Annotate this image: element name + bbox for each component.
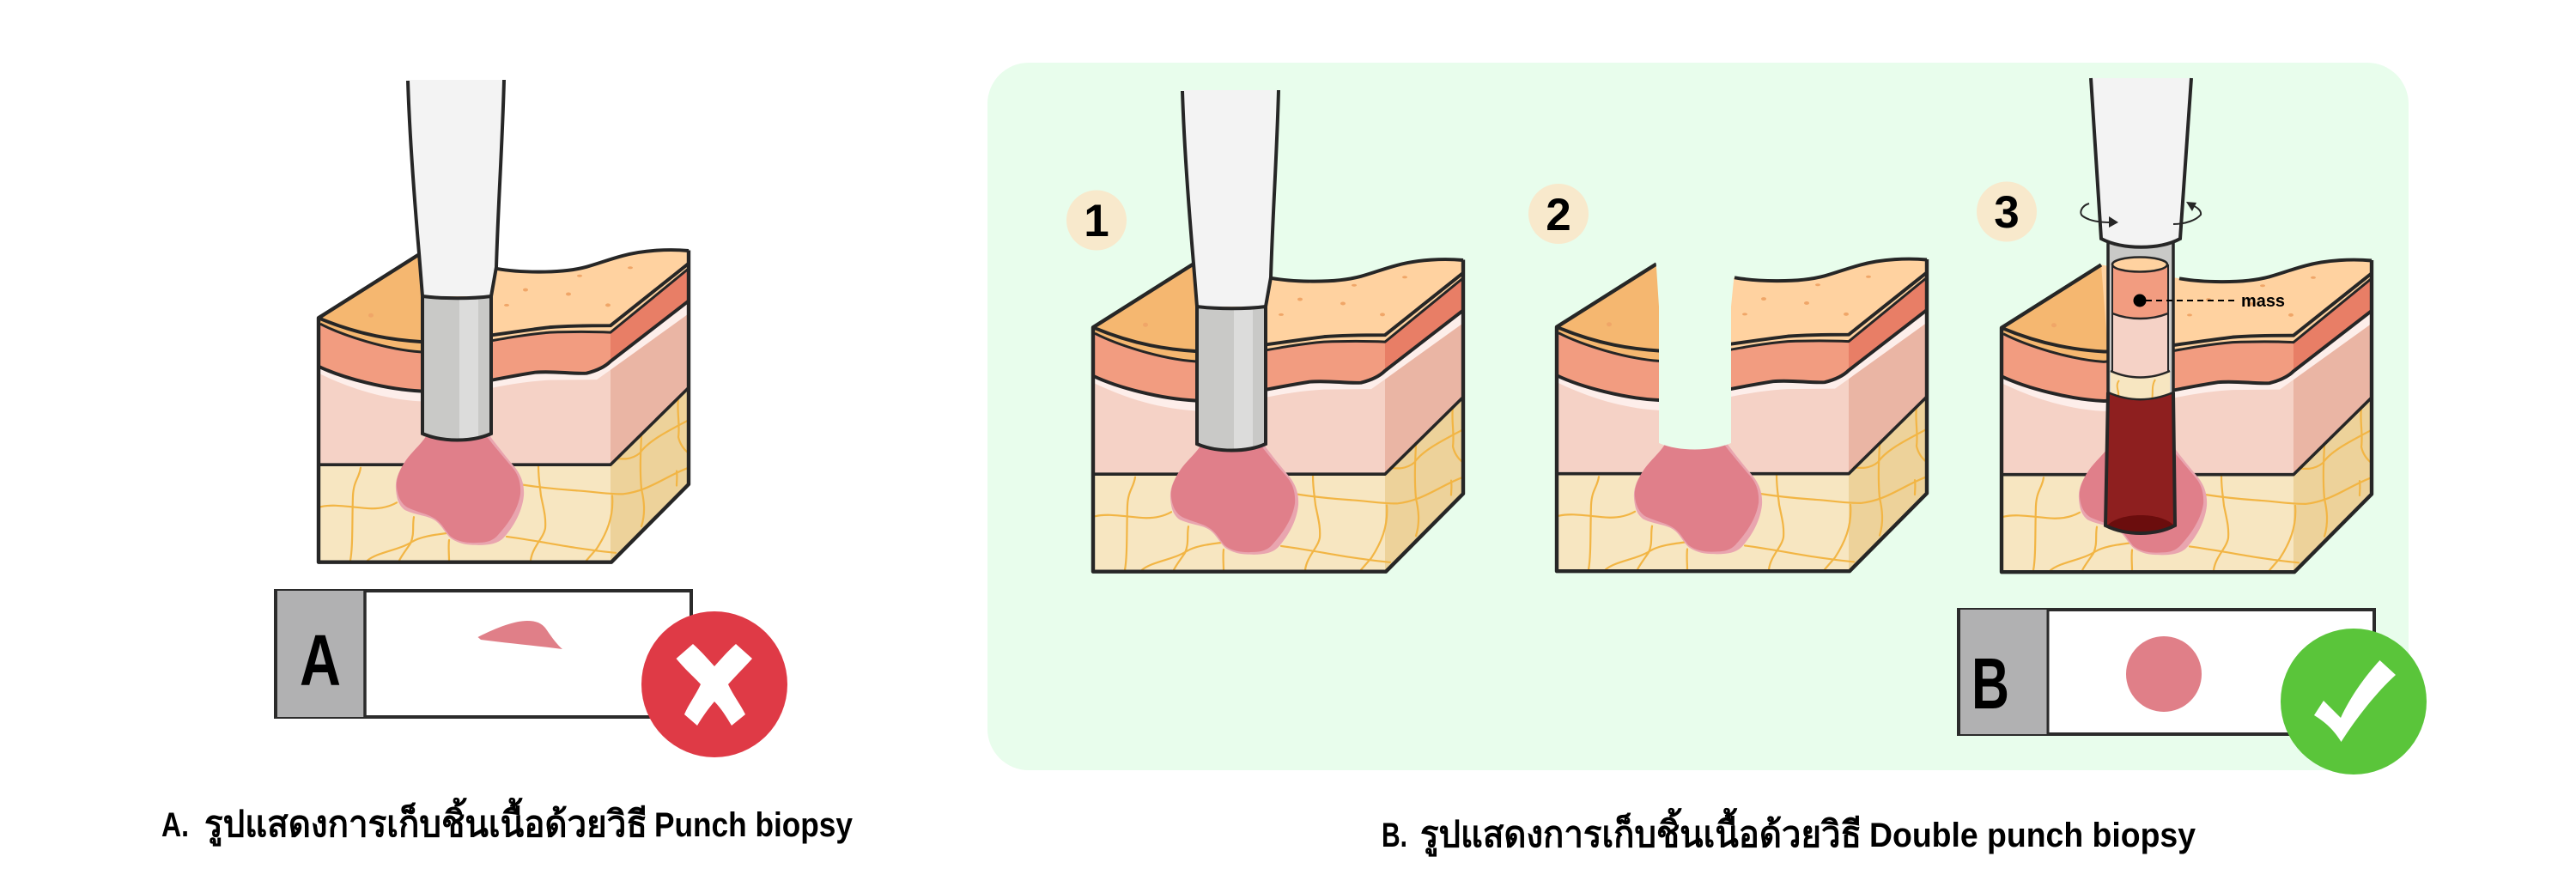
mass label [2133,292,2285,311]
punched hole [1656,254,1736,450]
step 2 [1528,184,1927,571]
step badge 2: 2 [1546,190,1571,240]
caption B [1382,807,2196,857]
tool handle [2091,78,2191,247]
letter A: A [300,620,341,701]
icon: cross mark [641,611,787,757]
step badge 1: 1 [1084,196,1109,246]
panel: double punch background [987,63,2409,770]
intact sample [2126,636,2202,712]
skin block [1093,259,1463,572]
step 1 [1066,90,1463,572]
result slide B [1959,608,2427,775]
caption A [161,797,854,847]
caption A: Punch biopsy [654,806,854,844]
skin block [2002,260,2372,572]
step badge 3: 3 [1994,187,2020,238]
arrow: rotation right [2173,202,2201,224]
caption B: B. [1382,817,1407,854]
result slide A [276,589,787,757]
caption A: รูปแสดงการเก็บชิ้นเนื้อด้วยวิธี [204,797,647,847]
tissue core [2111,258,2170,401]
step badge 2 [1528,184,1589,244]
fragment [477,621,562,649]
letter B: B [1971,643,2009,724]
punch tool [408,80,504,440]
step badge 1 [1066,191,1127,251]
caption A: A. [161,806,189,844]
arrow: rotation left [2081,204,2118,228]
skin block [1557,259,1927,571]
skin block with tumour [319,250,689,562]
inner collar [2108,240,2173,397]
step 3 [1977,78,2372,572]
punch tool [1182,90,1279,451]
step badge 3 [1977,182,2037,242]
blood-filled channel [2105,392,2175,533]
caption B: รูปแสดงการเก็บชิ้นเนื้อด้วยวิธี [1420,807,1862,857]
icon: check mark [2281,629,2427,775]
mass label: mass [2241,292,2285,311]
caption B: Double punch biopsy [1869,817,2196,854]
panel A: punch biopsy illustration [319,80,689,562]
